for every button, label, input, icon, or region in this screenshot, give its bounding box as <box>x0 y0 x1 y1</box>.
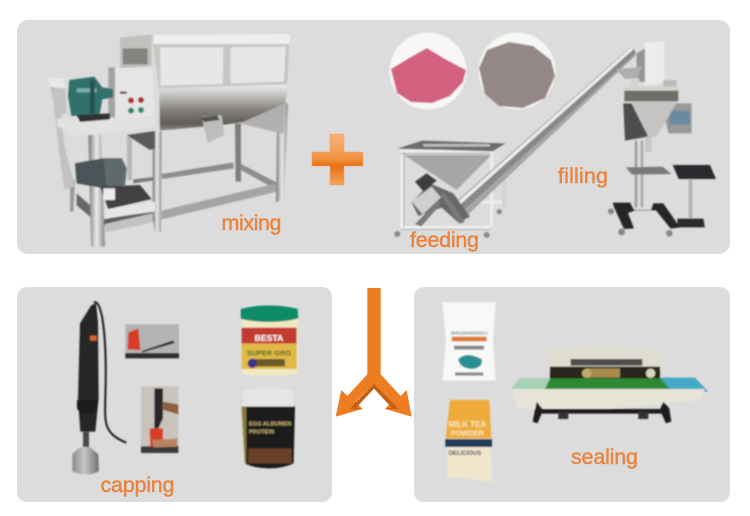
casters <box>394 209 502 238</box>
green gearbox <box>68 77 113 116</box>
yellow bag: DELICIOUS <box>449 451 481 457</box>
yellow bag: POWDER <box>451 429 485 438</box>
control box <box>115 67 155 119</box>
jar: super gro <box>241 305 298 376</box>
small photo 1 <box>125 324 179 358</box>
panel: capping <box>17 287 332 502</box>
grey powder circle <box>478 32 556 110</box>
belt guard <box>48 77 75 190</box>
lower motor <box>75 158 127 188</box>
lower frame <box>77 162 278 233</box>
capping tool <box>72 302 126 474</box>
hopper frame <box>400 151 504 229</box>
feeder motor <box>412 183 470 223</box>
jar: egg albumen protein <box>242 387 295 468</box>
small photo 2 <box>141 386 178 453</box>
filler tower <box>645 42 664 86</box>
label: sealing: sealing <box>571 445 638 469</box>
feeding and filling machine <box>394 42 716 238</box>
yellow bag: MILK TEA <box>448 420 486 429</box>
legs <box>70 103 288 247</box>
panel: sealing <box>414 287 730 502</box>
filler cone bracket <box>623 103 648 141</box>
bottle cap <box>72 447 99 474</box>
band sealer <box>512 347 708 423</box>
hopper cone <box>404 155 491 190</box>
hopper box <box>152 34 290 88</box>
jar: egg albumen protein: EGG ALBUMEN <box>249 422 291 428</box>
panel: mixing feeding filling <box>17 20 730 254</box>
label: feeding: feeding <box>410 228 479 252</box>
jar: super gro: BESTA <box>255 333 284 343</box>
icon: plus <box>312 134 363 185</box>
mixing machine <box>48 34 290 247</box>
jar: egg albumen protein: PROTEIN <box>249 430 274 436</box>
filler base <box>613 203 680 229</box>
pink powder circle <box>390 32 466 110</box>
label: mixing: mixing <box>222 211 282 235</box>
auger tube <box>456 47 636 215</box>
split arrow <box>336 288 412 417</box>
bottom-left content <box>72 302 298 474</box>
spout <box>202 115 224 143</box>
jar: super gro: SUPER GRO <box>247 349 291 358</box>
yellow bag <box>445 400 492 482</box>
scale <box>673 165 716 179</box>
label: filling: filling <box>558 164 608 188</box>
trough <box>159 84 288 131</box>
powder samples <box>390 32 556 110</box>
label: capping: capping <box>100 473 174 497</box>
bottom-right content <box>442 302 708 482</box>
white bag <box>442 302 496 381</box>
white bag: SHUJIONGKELI <box>451 330 489 336</box>
